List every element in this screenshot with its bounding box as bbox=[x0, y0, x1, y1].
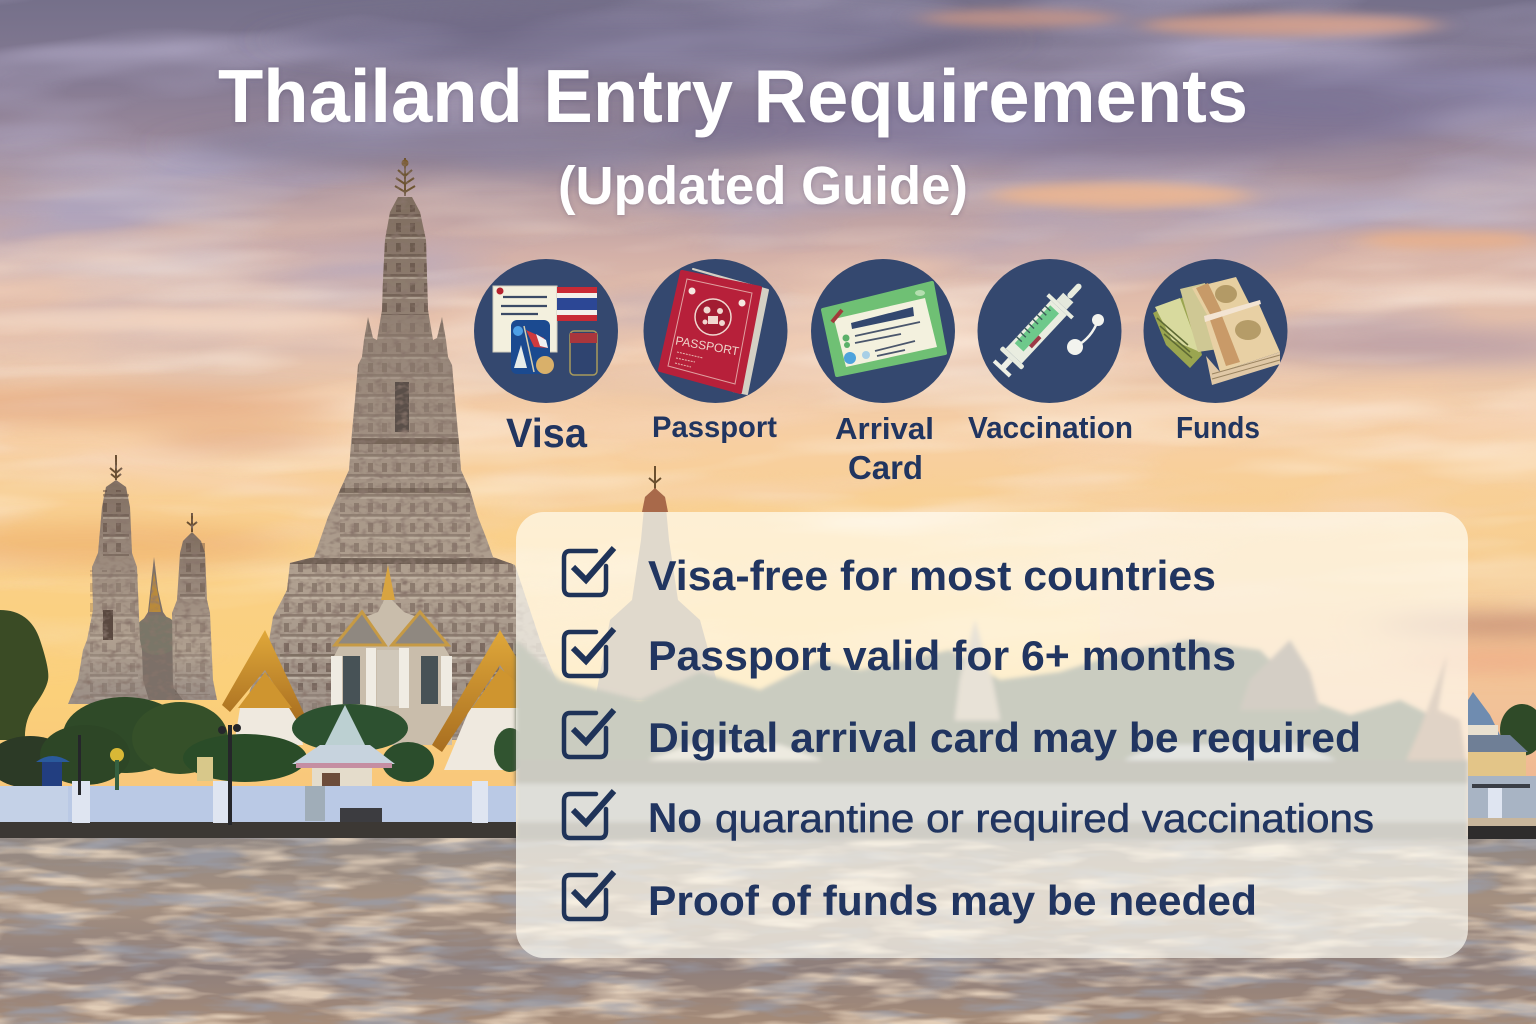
icon: arrival card bbox=[811, 259, 955, 403]
icon labels: Visa bbox=[506, 410, 588, 456]
riverside wall and promenade bbox=[0, 724, 1536, 839]
icon: vaccination syringe and spoon bbox=[978, 259, 1122, 403]
panel: requirements checklist bbox=[516, 512, 1468, 958]
icon: funds banknote stacks bbox=[1144, 259, 1288, 403]
subtitle: (Updated Guide) bbox=[558, 156, 968, 216]
temples behind the panel bbox=[516, 466, 1468, 840]
trees bbox=[0, 610, 526, 788]
icon labels bbox=[506, 410, 1260, 486]
row 4: quarantine or required vaccinations bbox=[715, 797, 1374, 841]
icon: passport bbox=[644, 259, 788, 403]
temple: central portico bbox=[331, 565, 452, 745]
row 5: Proof of funds may be needed bbox=[648, 877, 1257, 924]
row 4: No bbox=[648, 794, 702, 841]
icon labels: Card bbox=[848, 449, 923, 486]
row 3: Digital arrival card may be required bbox=[648, 714, 1361, 761]
icon labels: Arrival bbox=[835, 411, 934, 446]
temple: small left prang group bbox=[68, 455, 217, 704]
icon: passport: PASSPORT bbox=[674, 334, 741, 359]
temple: far right shrine bbox=[1468, 692, 1536, 826]
temple: right golden roof hall bbox=[432, 630, 530, 770]
icon labels: Vaccination bbox=[968, 410, 1133, 445]
row 1: Visa-free for most countries bbox=[648, 552, 1216, 599]
icon: visa bbox=[474, 259, 618, 403]
row 4 bbox=[564, 791, 1374, 841]
row 2: Passport valid for 6+ months bbox=[648, 632, 1236, 679]
pavilion bbox=[292, 705, 395, 788]
temple: main central prang Wat Arun bbox=[250, 158, 554, 740]
water: Chao Phraya river bbox=[0, 836, 1536, 1024]
icon labels: Passport bbox=[652, 411, 777, 444]
title: Thailand Entry Requirements bbox=[218, 54, 1248, 138]
icon labels: Funds bbox=[1176, 410, 1260, 445]
temple: left golden roof hall bbox=[222, 630, 308, 745]
